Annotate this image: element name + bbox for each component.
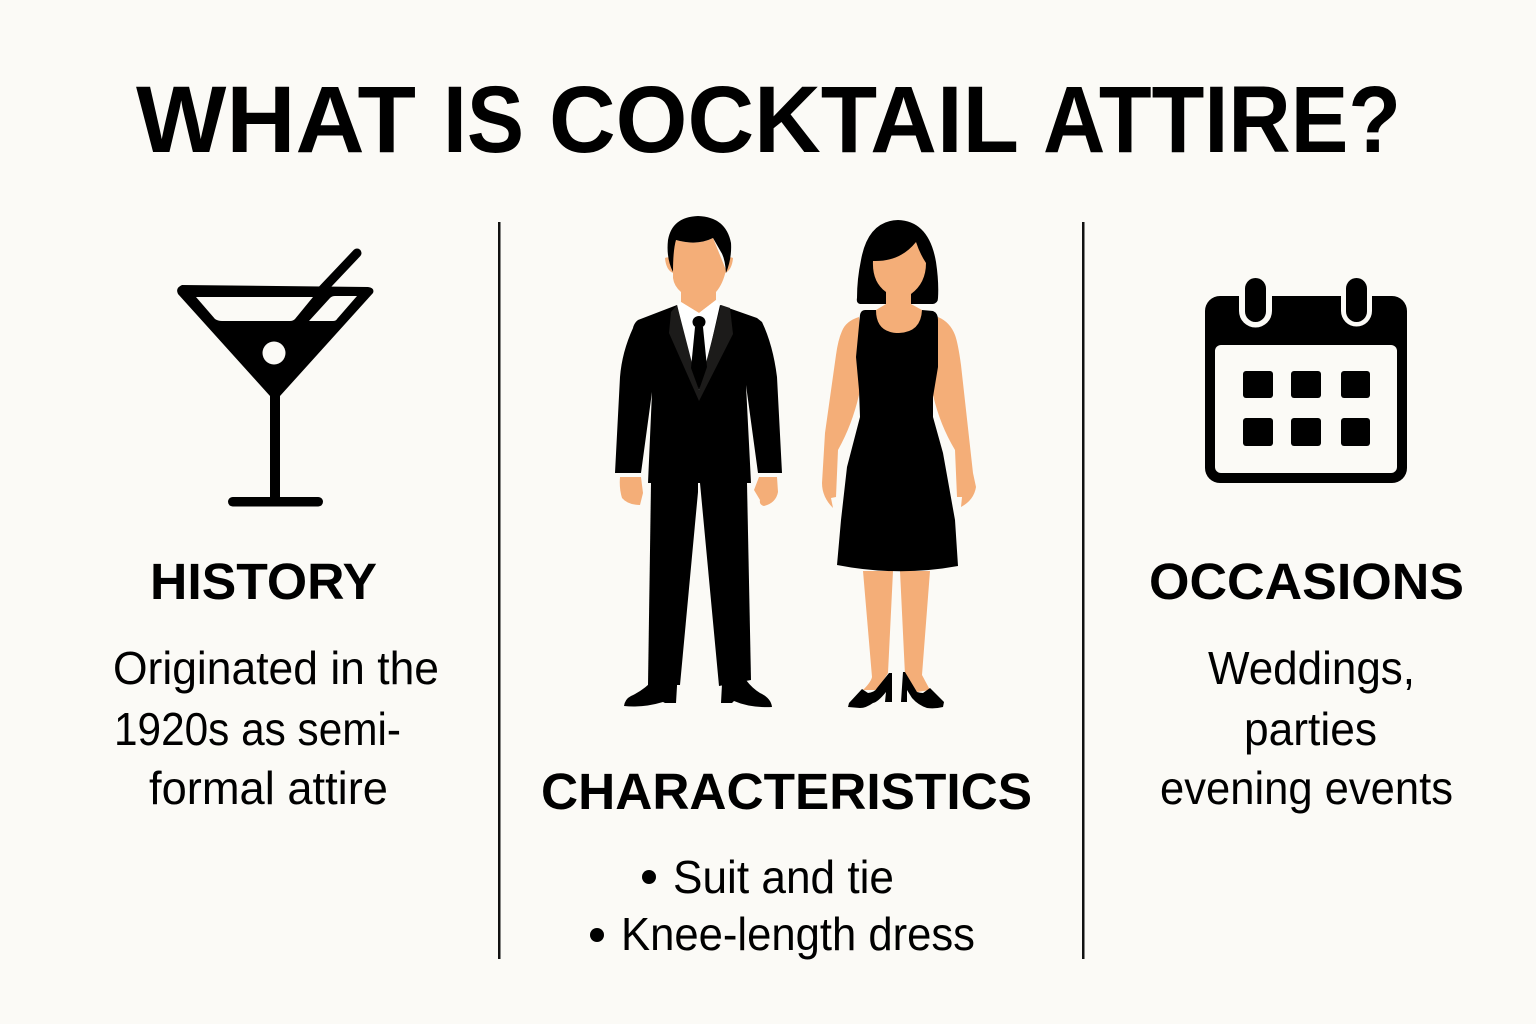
panel: history [113,253,439,814]
text: occasions description: evening events [1160,762,1453,814]
list: characteristics: Suit and tie [673,851,894,903]
title: ATTIRE? [1043,67,1401,173]
icon: calendar [1205,278,1407,483]
text: history description [113,642,439,814]
list: characteristics [590,851,975,960]
text: occasions description: parties [1244,703,1377,755]
title: COCKTAIL [549,67,1019,173]
title: IS [443,67,524,173]
heading: occasions: OCCASIONS [1149,553,1464,610]
text: history description: Originated in the [113,642,439,694]
panel: occasions [1149,278,1464,814]
icon: man in suit [615,216,782,707]
heading: history: HISTORY [150,553,377,610]
text: history description: formal attire [149,762,388,814]
text: history description: 1920s as semi- [114,703,401,755]
panel: characteristics [541,216,1032,960]
title [136,67,1401,173]
icon: cocktail glass [177,253,373,506]
title: WHAT [136,67,416,173]
list: characteristics: Knee-length dress [621,908,975,960]
icon: woman in dress [822,220,976,708]
text: occasions description [1160,642,1453,814]
text: occasions description: Weddings, [1208,642,1415,694]
heading: characteristics: CHARACTERISTICS [541,763,1032,820]
